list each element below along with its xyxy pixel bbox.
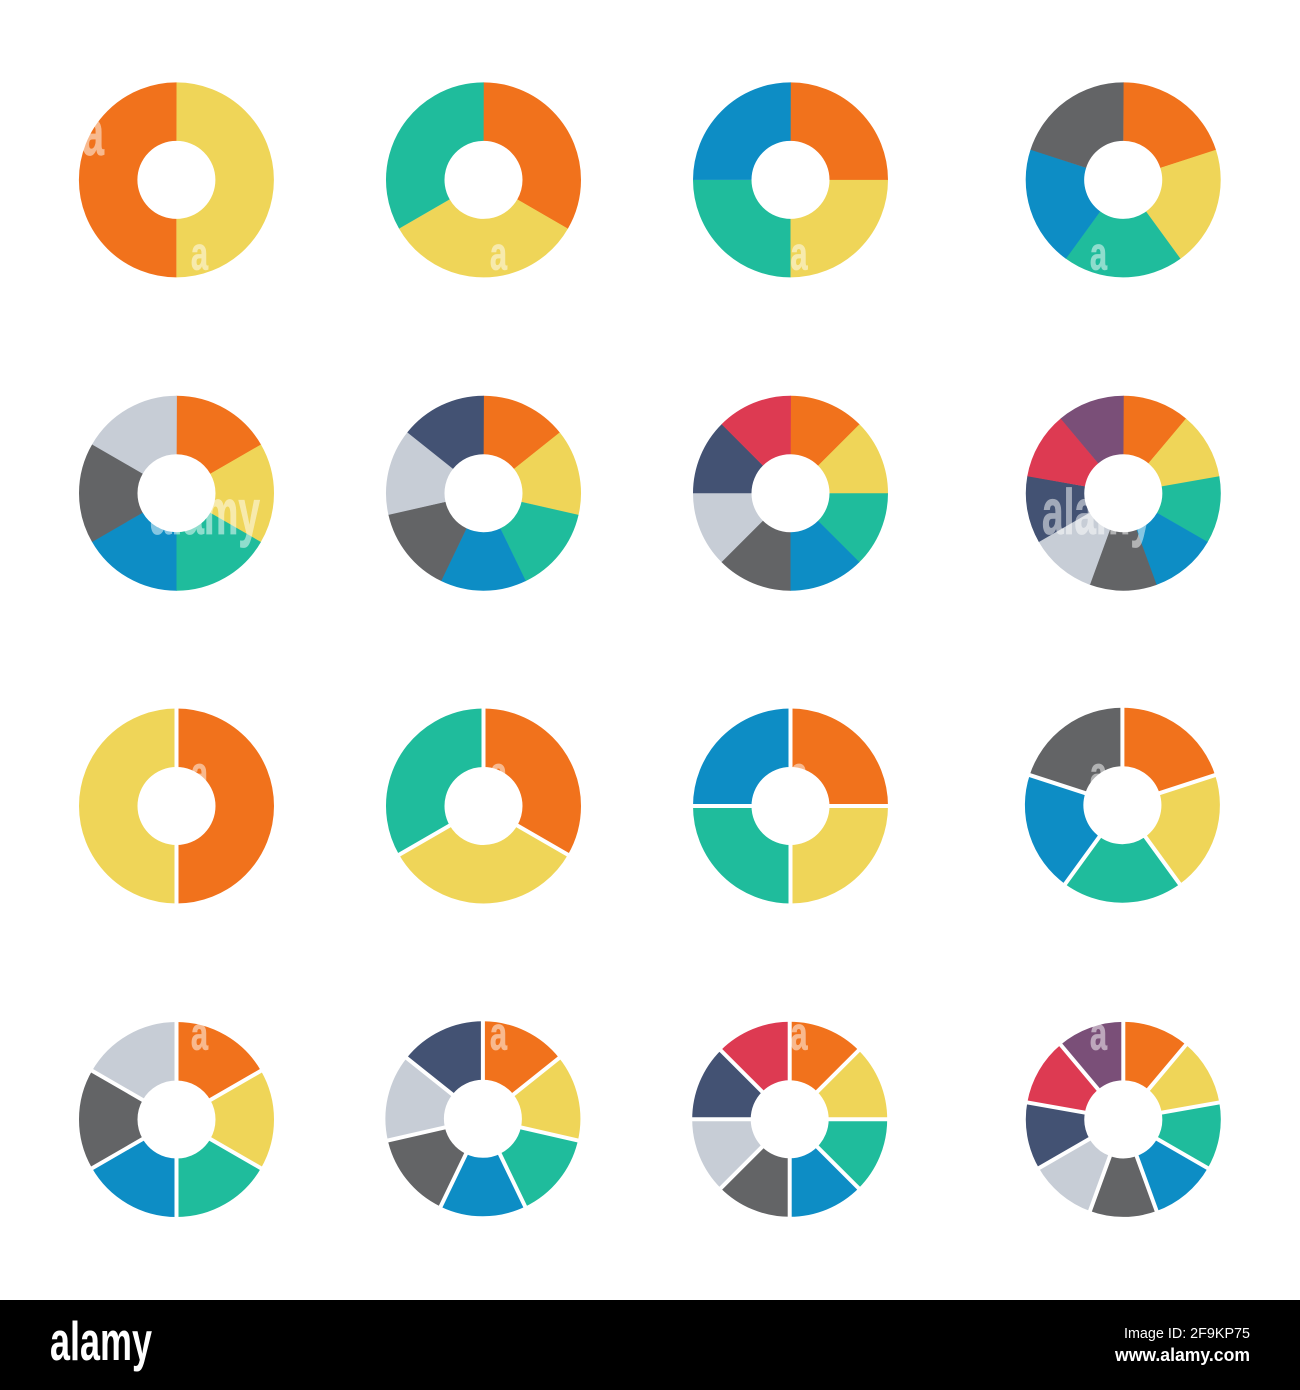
segment: navy bbox=[722, 425, 859, 561]
watermarks: a bbox=[82, 95, 105, 169]
segment: yellow bbox=[1036, 719, 1208, 891]
segment: teal bbox=[83, 400, 270, 586]
segment: yellow bbox=[693, 1023, 886, 1216]
watermarks: a bbox=[1090, 747, 1107, 799]
segment: gray bbox=[1036, 406, 1211, 581]
segment: teal bbox=[1044, 1040, 1202, 1198]
segment: blue bbox=[1027, 710, 1218, 901]
segment: orange bbox=[415, 1051, 551, 1187]
watermarks: a bbox=[1090, 228, 1107, 280]
segment: yellow bbox=[722, 738, 859, 874]
segment: teal bbox=[722, 738, 859, 874]
donut chart: 9 segments bbox=[1027, 397, 1219, 589]
segment: yellow bbox=[388, 397, 579, 589]
segment: blue bbox=[693, 1023, 886, 1216]
segment: gray bbox=[1036, 719, 1208, 891]
footer logo: alamy bbox=[50, 1310, 152, 1372]
donut chart: 2 segments bbox=[108, 112, 245, 248]
segment: orange bbox=[415, 112, 552, 248]
separated donut chart: 4 segments bbox=[686, 702, 894, 910]
watermarks: a bbox=[1090, 1008, 1107, 1060]
segment: blue bbox=[722, 738, 859, 874]
segment: light gray bbox=[402, 411, 565, 575]
watermarks: a bbox=[490, 1008, 507, 1060]
separated donut chart: 5 segments bbox=[1023, 701, 1221, 901]
donut chart: 3 segments bbox=[390, 87, 577, 273]
segment: blue bbox=[392, 1028, 574, 1210]
segment: yellow bbox=[390, 713, 577, 899]
segment: teal bbox=[390, 713, 577, 899]
segment: teal bbox=[722, 112, 859, 248]
segment: teal bbox=[722, 425, 859, 561]
segment: blue bbox=[1028, 85, 1219, 275]
segment: yellow bbox=[387, 1023, 579, 1215]
segment: orange bbox=[722, 425, 859, 561]
watermarks: a bbox=[490, 228, 507, 280]
segment: blue bbox=[722, 112, 859, 248]
watermarks bbox=[82, 95, 1152, 1060]
segment: orange bbox=[1055, 112, 1191, 248]
segment: blue bbox=[392, 402, 575, 584]
footer image id: Image ID: 2F9KP75 bbox=[1124, 1325, 1250, 1342]
watermarks: a bbox=[490, 747, 507, 799]
separated donut chart: 8 segments bbox=[686, 1015, 894, 1223]
segment: orange bbox=[108, 1051, 245, 1188]
watermarks: alamy bbox=[1042, 476, 1152, 548]
segment: teal bbox=[721, 1051, 858, 1188]
segment: orange bbox=[415, 425, 552, 561]
donut chart: 7 segments bbox=[388, 397, 579, 589]
footer bar bbox=[0, 1300, 1300, 1390]
segment: orange bbox=[721, 1051, 858, 1188]
segment: teal bbox=[402, 411, 565, 575]
segment: navy bbox=[388, 397, 579, 589]
segment: gray bbox=[392, 402, 575, 584]
watermarks: a bbox=[191, 747, 208, 799]
watermarks: a bbox=[191, 1008, 208, 1060]
segment: yellow bbox=[1027, 397, 1219, 589]
segment: yellow bbox=[722, 112, 859, 248]
segment: yellow bbox=[83, 1026, 270, 1213]
segment: yellow bbox=[1027, 1023, 1219, 1216]
donut chart: 4 segments bbox=[722, 112, 859, 248]
watermarks: a bbox=[790, 228, 808, 280]
segment: blue bbox=[108, 425, 245, 561]
footer url: www.alamy.com bbox=[1114, 1345, 1250, 1365]
watermarks: a bbox=[191, 228, 208, 280]
segment: red bbox=[1044, 414, 1202, 572]
segment: blue bbox=[108, 1051, 245, 1188]
separated donut chart: 2 segments bbox=[108, 702, 245, 910]
segment: light gray bbox=[1036, 406, 1211, 581]
separated donut chart: 6 segments bbox=[83, 1016, 270, 1224]
segment: orange bbox=[722, 738, 859, 874]
segment: orange bbox=[108, 112, 245, 248]
segment: orange bbox=[108, 738, 245, 874]
segment: blue bbox=[1030, 1026, 1217, 1213]
watermarks: a bbox=[790, 1008, 808, 1060]
donut chart: 8 segments bbox=[694, 397, 887, 590]
segment: blue bbox=[1030, 400, 1217, 586]
segment: navy bbox=[387, 1023, 579, 1215]
segment: gray bbox=[722, 425, 859, 561]
separated donut chart: 9 segments bbox=[1021, 1015, 1226, 1217]
segment: yellow bbox=[694, 397, 887, 590]
segment: red bbox=[694, 397, 887, 590]
segment: purple bbox=[1027, 397, 1219, 589]
segment: teal bbox=[1028, 85, 1219, 275]
segment: teal bbox=[1027, 710, 1218, 901]
segment: light gray bbox=[694, 397, 887, 590]
segment: orange bbox=[1055, 1051, 1192, 1188]
watermarks: a bbox=[790, 747, 808, 799]
segment: navy bbox=[721, 1051, 858, 1188]
segment: light gray bbox=[83, 1026, 270, 1213]
segment: yellow bbox=[108, 738, 245, 874]
segment: gray bbox=[83, 400, 270, 586]
segment: navy bbox=[1030, 400, 1217, 586]
segment: orange bbox=[1054, 737, 1191, 873]
donut chart: 5 segments bbox=[1028, 85, 1219, 275]
segment: gray bbox=[392, 1028, 574, 1210]
donut chart: 6 segments bbox=[83, 400, 270, 586]
segment: yellow bbox=[108, 112, 245, 248]
segment: teal bbox=[1044, 414, 1202, 572]
segment: light gray bbox=[1036, 1032, 1211, 1207]
segment: yellow bbox=[83, 400, 270, 586]
segment: light gray bbox=[693, 1023, 886, 1216]
segment: purple bbox=[1027, 1023, 1219, 1216]
watermarks: alamy bbox=[150, 476, 260, 548]
separated donut chart: 3 segments bbox=[390, 702, 577, 899]
segment: orange bbox=[108, 425, 245, 561]
segment: teal bbox=[390, 87, 577, 273]
segment: gray bbox=[1037, 94, 1209, 266]
separated donut chart: 7 segments bbox=[382, 1015, 584, 1215]
segment: orange bbox=[722, 112, 859, 248]
segment: red bbox=[1044, 1040, 1202, 1198]
segment: yellow bbox=[390, 87, 577, 273]
segment: orange bbox=[1055, 425, 1192, 561]
segment: gray bbox=[83, 1026, 270, 1213]
segment: navy bbox=[1030, 1026, 1217, 1213]
segment: gray bbox=[1036, 1032, 1211, 1207]
segment: light gray bbox=[83, 400, 270, 586]
segment: light gray bbox=[401, 1037, 565, 1201]
segment: orange bbox=[415, 738, 552, 874]
segment: blue bbox=[694, 397, 887, 590]
segment: teal bbox=[401, 1037, 565, 1201]
segment: gray bbox=[721, 1051, 858, 1188]
segment: teal bbox=[83, 1026, 270, 1213]
segment: red bbox=[693, 1023, 886, 1216]
segment: yellow bbox=[1037, 94, 1209, 266]
